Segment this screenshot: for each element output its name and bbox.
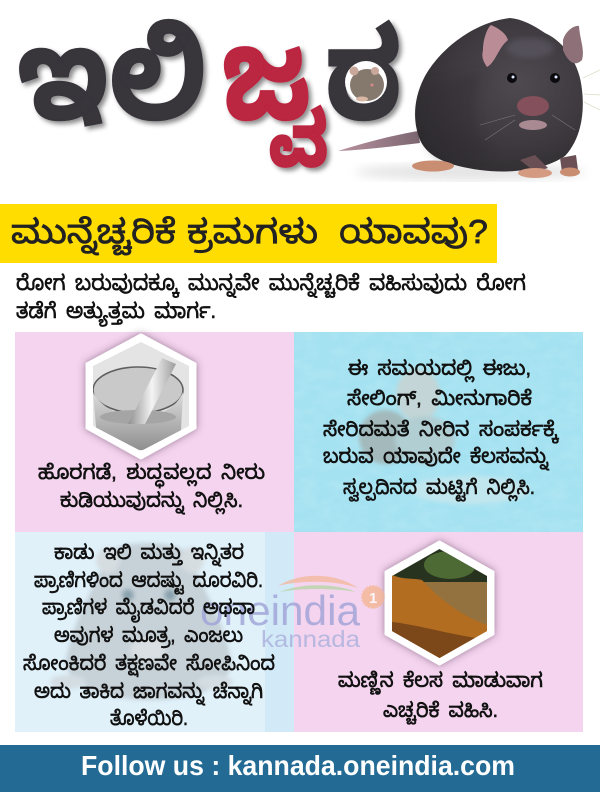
title: ಇಲಿ	[17, 7, 207, 146]
panel text	[338, 670, 543, 725]
panel text: ಕುಡಿಯುವುದನ್ನು ನಿಲ್ಲಿಸಿ.	[60, 490, 243, 515]
icon: glass of water hexagon	[87, 335, 195, 458]
title	[17, 4, 402, 168]
panel text: avoid animals	[23, 542, 275, 730]
panel text: avoid animals: ಕಾಡು ಇಲಿ ಮತ್ತು ಇನ್ನಿತರ	[54, 542, 244, 567]
panel text: avoid animals: ತೊಳೆಯಿರಿ.	[110, 708, 188, 730]
footer: Follow us : kannada.oneindia.com	[81, 750, 515, 781]
faded rat photo	[50, 543, 233, 700]
panel: soil work	[294, 532, 583, 732]
panel text: avoid animals: ಅವುಗಳ ಮೂತ್ರ, ಎಂಜಲು	[54, 625, 243, 648]
panel: water activities	[294, 332, 583, 532]
panel text	[323, 358, 559, 502]
panel text: ಎಚ್ಚರಿಕೆ ವಹಿಸಿ.	[383, 700, 498, 725]
panel text	[38, 462, 265, 515]
watermark logo	[200, 576, 384, 652]
watermark logo: 1	[369, 590, 377, 607]
title: ಜ್ವ	[222, 4, 327, 168]
icon: small rat in title letter	[345, 61, 387, 103]
panel text: ಸೇರಿದಮತೆ ನೀರಿನ ಸಂಪರ್ಕಕ್ಕೆ	[323, 419, 559, 444]
heading band: ಮುನ್ನೆಚ್ಚರಿಕೆ	[11, 213, 176, 256]
panel text: ಮಣ್ಣಿನ ಕೆಲಸ ಮಾಡುವಾಗ	[338, 670, 543, 695]
panel: avoid animals	[15, 532, 294, 732]
intro text: ರೋಗ ಬರುವುದಕ್ಕೂ ಮುನ್ನವೇ ಮುನ್ನೆಚ್ಚರಿಕೆ ವಹಿಸುವುದು ರೋಗ	[16, 272, 526, 298]
panel text: avoid animals: ಅದು ತಾಕಿದ ಜಾಗವನ್ನು ಚೆನ್ನಾಗಿ	[34, 681, 263, 706]
panel text: avoid animals: ಪ್ರಾಣಿಗಳಿಂದ ಆದಷ್ಟು ದೂರವಿರಿ.	[34, 570, 263, 595]
heading band: ಯಾವವು?	[339, 213, 488, 250]
swimmer faded photo	[359, 369, 530, 504]
footer	[0, 745, 600, 792]
title: ರ	[325, 7, 402, 146]
icon: soil mound hexagon	[386, 542, 493, 664]
icon: black rat illustration	[338, 18, 600, 180]
panel text: avoid animals: ಪ್ರಾಣಿಗಳ ಮೈಡವಿದರೆ ಅಥವಾ	[42, 597, 255, 623]
heading band: ಕ್ರಮಗಳು	[187, 213, 318, 253]
intro text: ತಡೆಗೆ ಅತ್ಯುತ್ತಮ ಮಾರ್ಗ.	[16, 300, 216, 327]
heading band	[0, 204, 497, 263]
panel text: ಸೇಲಿಂಗ್, ಮೀನುಗಾರಿಕೆ	[347, 388, 532, 410]
panel text: ಸ್ವಲ್ಪದಿನದ ಮಟ್ಟಿಗೆ ನಿಲ್ಲಿಸಿ.	[343, 477, 535, 502]
panel text: ಹೊರಗಡೆ, ಶುದ್ಧವಲ್ಲದ ನೀರು	[38, 462, 265, 489]
panel text: ಬರುವ ಯಾವುದೇ ಕೆಲಸವನ್ನು	[323, 446, 550, 471]
watermark logo: kannada	[261, 626, 360, 652]
panel text: avoid animals: ಸೋಂಕಿದರೆ ತಕ್ಷಣವೇ ಸೋಪಿನಿಂದ	[23, 653, 275, 678]
intro text	[16, 272, 526, 327]
panel: drinking water	[15, 332, 294, 532]
watermark logo: oneindia	[200, 587, 361, 634]
panel text: ಈ ಸಮಯದಲ್ಲಿ ಈಜು,	[348, 358, 531, 383]
